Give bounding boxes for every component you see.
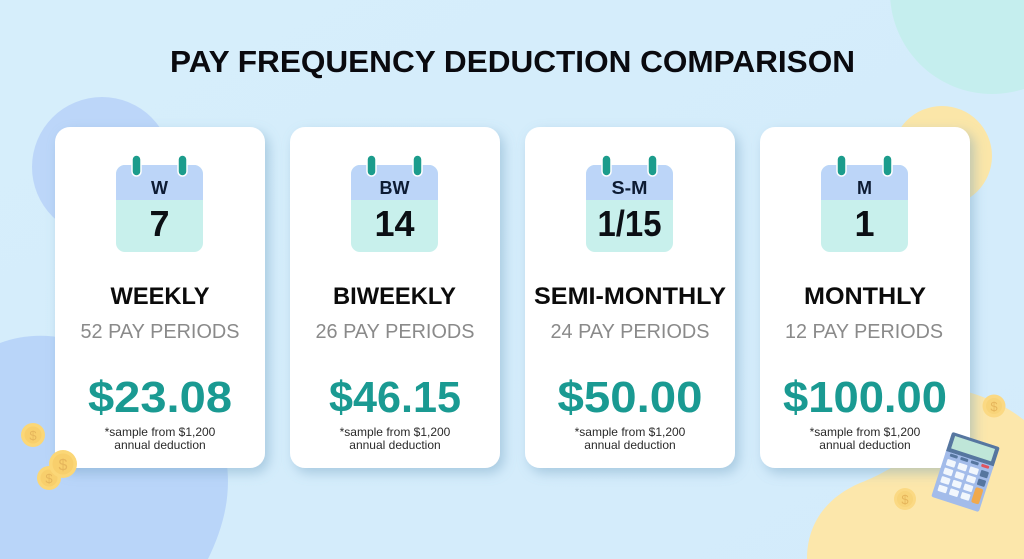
amount: $50.00 xyxy=(558,373,702,422)
panel: monthly xyxy=(760,127,970,468)
icon: coin: $ xyxy=(901,492,909,507)
amount: $46.15 xyxy=(329,373,461,422)
icon: coin xyxy=(37,466,61,490)
text: pay periods: 24 PAY PERIODS xyxy=(550,321,710,343)
icon: coin: $ xyxy=(45,471,53,486)
icon: coin xyxy=(982,394,1006,418)
background shape: yellow blob xyxy=(807,392,1024,559)
panel: semi-monthly xyxy=(525,127,735,468)
background shape: teal corner xyxy=(890,0,1024,94)
icon: calendar weekly xyxy=(116,155,203,252)
text: pay periods: 12 PAY PERIODS xyxy=(785,321,943,343)
note: *sample from $1,200 xyxy=(810,425,921,439)
note: *sample from $1,200 xyxy=(105,425,216,439)
icon: calendar semi-monthly: 1/15 xyxy=(598,203,662,244)
heading: biweekly: BIWEEKLY xyxy=(333,283,456,310)
background shape: blue blob xyxy=(0,336,228,559)
icon: coin: $ xyxy=(29,428,37,443)
icon: coin xyxy=(49,450,77,478)
note: annual deduction xyxy=(584,438,676,452)
icon: coin xyxy=(21,423,45,447)
icon: calendar weekly: 7 xyxy=(149,203,170,244)
note: annual deduction xyxy=(819,438,911,452)
heading: monthly: MONTHLY xyxy=(804,283,926,310)
text: pay periods: 26 PAY PERIODS xyxy=(316,321,474,343)
amount: $23.08 xyxy=(88,373,232,422)
heading: weekly: WEEKLY xyxy=(110,283,210,310)
icon: calendar monthly xyxy=(821,155,908,252)
icon: coin: $ xyxy=(990,399,998,414)
note: *sample from $1,200 xyxy=(575,425,686,439)
icon: calendar biweekly: BW xyxy=(380,178,410,198)
note: annual deduction xyxy=(349,438,441,452)
heading: semi-monthly: SEMI-MONTHLY xyxy=(534,283,726,310)
icon: calendar semi-monthly: S-M xyxy=(612,178,648,198)
icon: calendar biweekly xyxy=(351,155,438,252)
amount: $100.00 xyxy=(783,373,947,422)
icon: calculator xyxy=(931,432,1000,512)
background shape: yellow circle xyxy=(892,106,992,206)
icon: calendar monthly: 1 xyxy=(854,203,875,244)
icon: calendar semi-monthly xyxy=(586,155,673,252)
icon: coin: $ xyxy=(59,457,68,474)
title: PAY FREQUENCY DEDUCTION COMPARISON xyxy=(170,44,855,79)
note: *sample from $1,200 xyxy=(340,425,451,439)
background shape: blue circle xyxy=(32,97,172,237)
text: pay periods: 52 PAY PERIODS xyxy=(80,321,240,343)
note: annual deduction xyxy=(114,438,206,452)
icon: calendar weekly: W xyxy=(151,178,168,198)
panel: biweekly xyxy=(290,127,500,468)
icon: calendar monthly: M xyxy=(857,178,872,198)
icon: calendar biweekly: 14 xyxy=(374,203,415,244)
icon: coin xyxy=(894,488,916,510)
panel: weekly xyxy=(55,127,265,468)
